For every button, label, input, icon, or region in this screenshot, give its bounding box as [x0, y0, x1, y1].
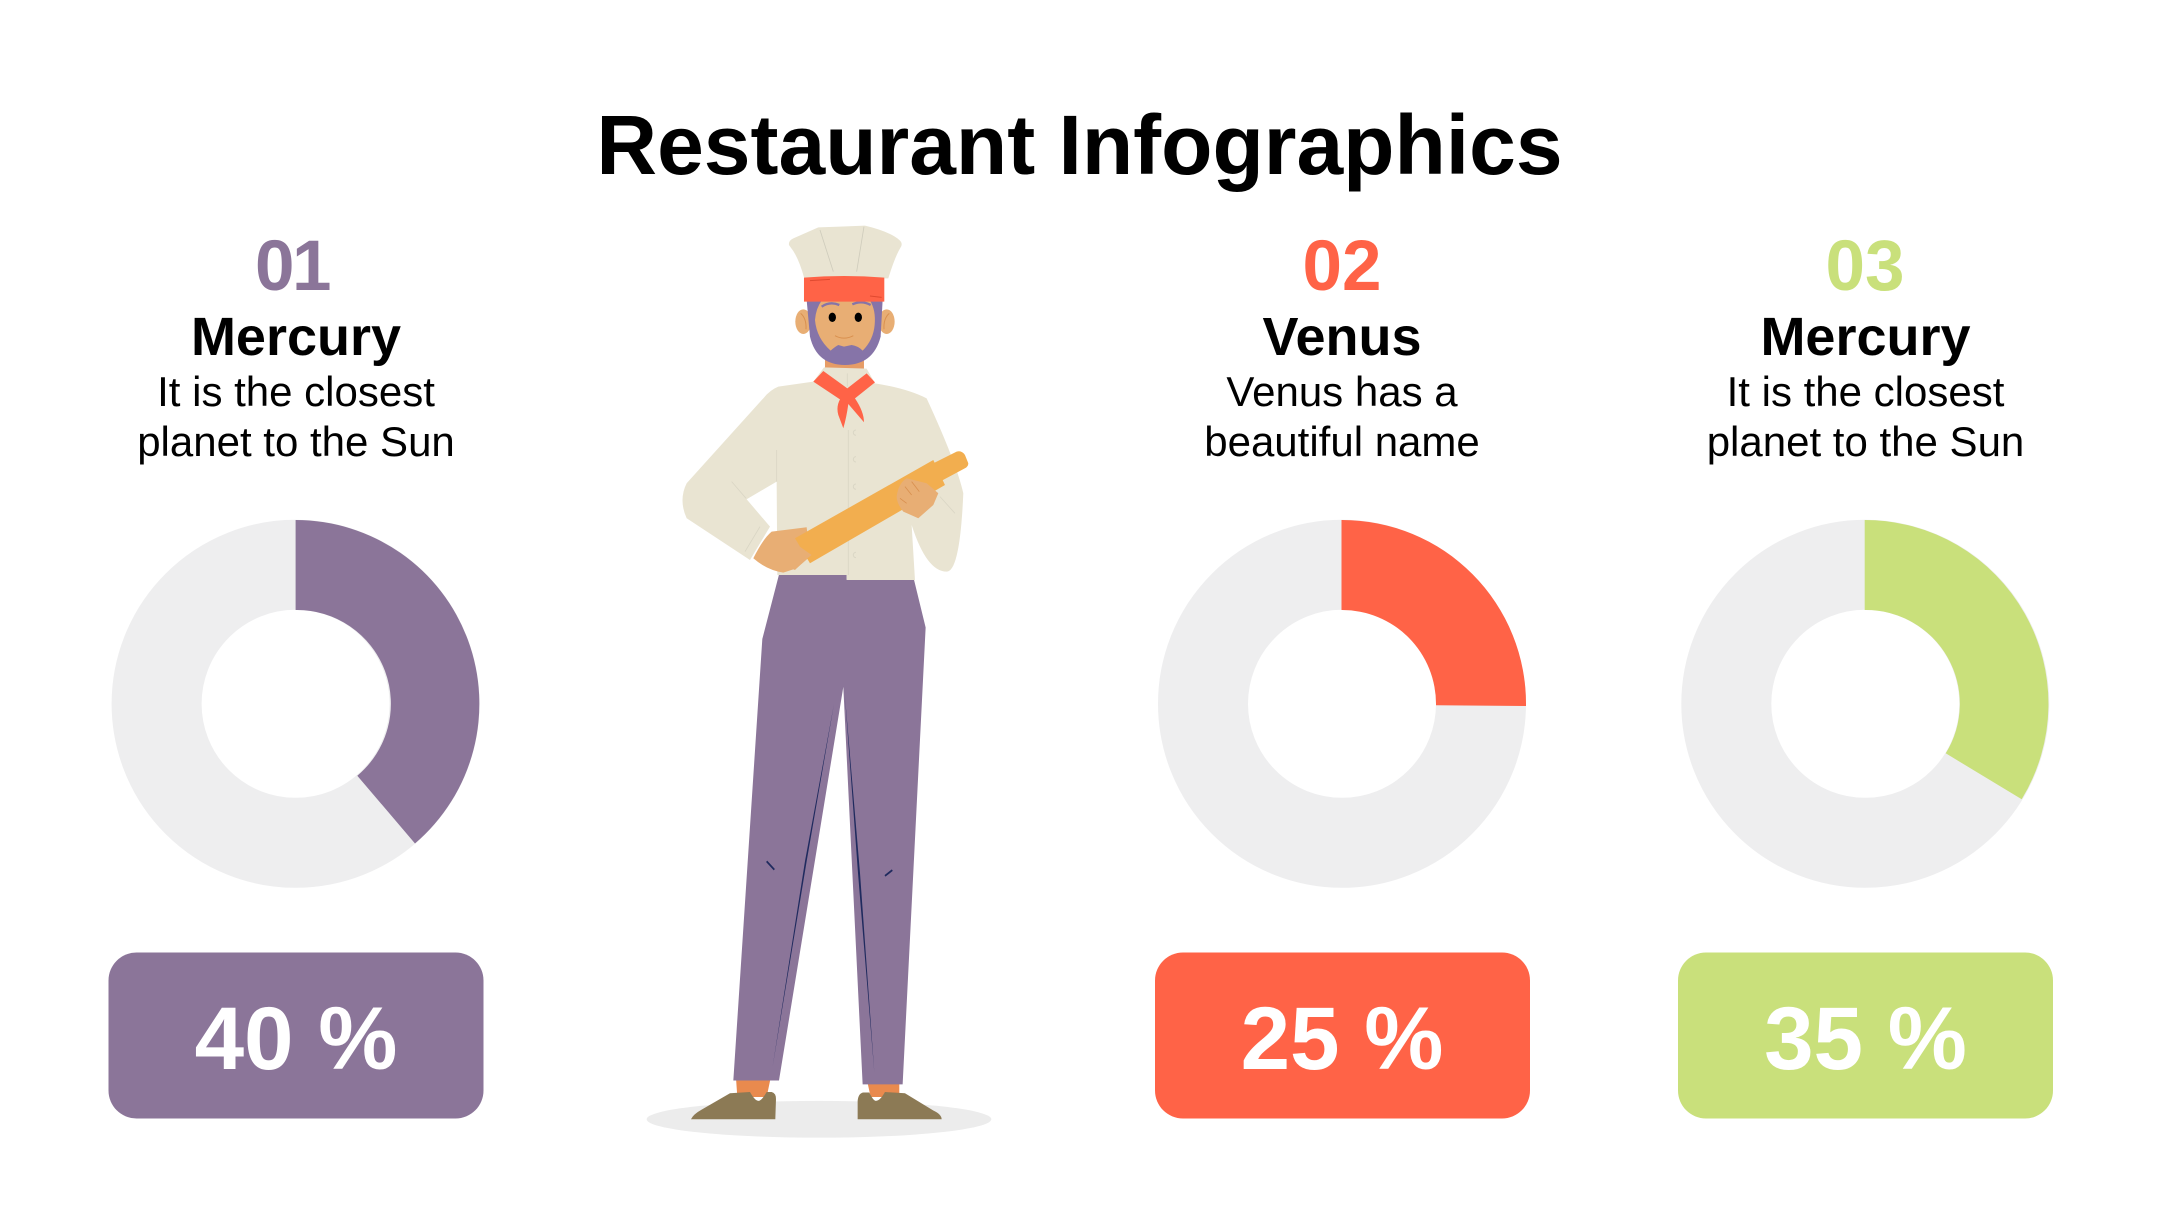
value pill 35%	[1678, 952, 2053, 1118]
illustration: chef holding rolling pin	[647, 226, 991, 1138]
donut chart 40%	[157, 520, 479, 844]
description: Venus has a	[1226, 368, 1458, 415]
value pill 40%	[108, 952, 484, 1118]
panel: 01 Mercury	[108, 227, 484, 1118]
value pill 25%	[1155, 952, 1530, 1118]
donut chart 25%	[1203, 520, 1526, 843]
chef lower body: shadow, trousers, shoes	[647, 575, 991, 1138]
description: It is the closest	[157, 368, 435, 415]
heading: Venus: Venus	[1262, 307, 1422, 367]
title: Restaurant Infographics	[596, 98, 1563, 192]
panel: 02 Venus	[1155, 227, 1530, 1118]
donut chart 35%	[1726, 520, 2048, 843]
value pill 35%: 35 %	[1764, 988, 1967, 1088]
description: planet to the Sun	[137, 418, 455, 465]
description: planet to the Sun	[1707, 418, 2024, 465]
heading: Mercury: Mercury	[191, 307, 401, 367]
value pill 40%: 40 %	[195, 988, 397, 1088]
number 01: 01	[255, 227, 330, 306]
chef upper body: hat, head, jacket, rolling pin, hands	[682, 226, 968, 580]
value pill 25%: 25 %	[1241, 988, 1443, 1088]
number 02: 02	[1303, 227, 1381, 306]
description: beautiful name	[1204, 418, 1480, 465]
description: It is the closest	[1727, 368, 2005, 415]
heading: Mercury: Mercury	[1760, 307, 1971, 367]
number 03: 03	[1826, 227, 1904, 306]
panel: 03 Mercury	[1678, 227, 2053, 1118]
